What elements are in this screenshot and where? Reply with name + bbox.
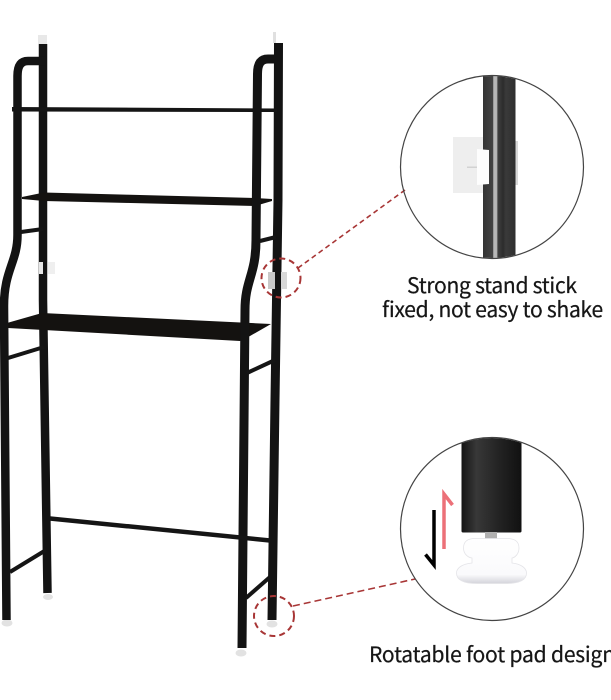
callout line: foot pad	[293, 579, 415, 606]
callout ring: stand stick	[262, 258, 300, 298]
leg	[462, 430, 522, 532]
pole	[483, 70, 516, 265]
callout ring: foot pad	[254, 596, 294, 636]
clip notch	[467, 166, 477, 168]
callout line: stand stick	[298, 190, 405, 268]
bracket clip	[477, 149, 489, 185]
rear plate	[516, 141, 518, 185]
arrow up	[444, 494, 452, 549]
caption: foot pad: Rotatable foot pad design	[369, 639, 611, 669]
bracket plate	[453, 137, 483, 193]
detail: foot pad	[400, 430, 584, 620]
arrow down	[426, 510, 434, 565]
left back post	[43, 44, 48, 593]
right back post	[272, 43, 278, 620]
right front post	[242, 59, 280, 648]
end caps	[38, 32, 276, 44]
caption: stand stick: fixed, not easy to shake	[382, 294, 603, 324]
detail ring	[400, 76, 584, 258]
foot pads	[2, 594, 278, 656]
bottom shelf	[7, 313, 271, 341]
middle shelf	[22, 192, 272, 206]
side braces	[8, 229, 276, 598]
detail ring	[400, 438, 584, 620]
bracket on right post	[268, 272, 287, 289]
detail: stand stick	[400, 70, 584, 265]
caption: stand stick	[382, 270, 603, 324]
pad	[456, 538, 526, 584]
shelf rack	[2, 32, 287, 656]
shelf bracket	[39, 262, 55, 274]
caption: stand stick: Strong stand stick	[407, 270, 577, 300]
top shelf	[12, 107, 277, 112]
left front post	[4, 61, 45, 620]
screw	[485, 532, 497, 539]
